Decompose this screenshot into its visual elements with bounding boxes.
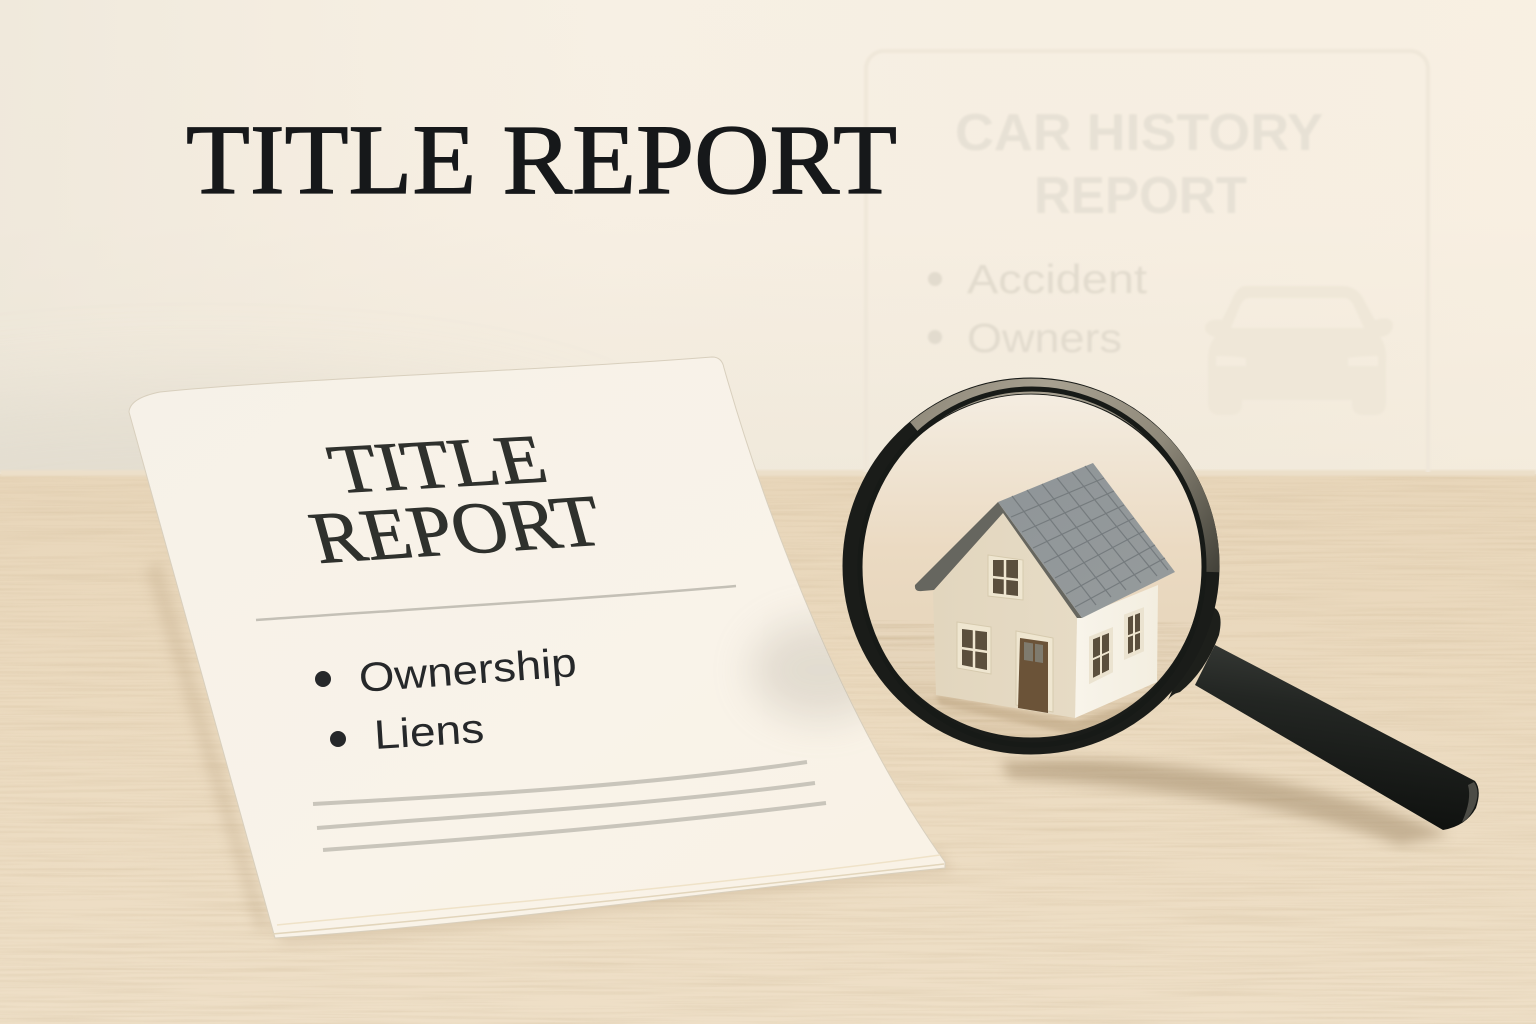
gable roof edge [915,502,1082,618]
door [1016,631,1053,713]
document heading divider [256,586,736,620]
document bullets: Liens [373,705,485,758]
house [915,463,1175,718]
upper window [988,555,1023,600]
lens interior [862,459,1202,738]
document bullets [315,639,578,758]
document pages edge [272,855,944,934]
lower left window [957,622,991,674]
faded car history report panel: Owners [967,315,1122,361]
magnifier shadow on document [750,620,890,720]
roof [998,463,1175,618]
faded car history report panel: REPORT [1034,167,1247,225]
document heading: REPORT [302,481,611,580]
house side wall [1075,585,1158,718]
document bullets: Ownership [357,639,578,701]
main title: TITLE REPORT [186,104,897,215]
faded car history report panel: Accident [967,256,1148,302]
document: title report [129,357,945,938]
faded car history report panel [866,51,1428,491]
house front wall [933,513,1077,718]
document shadow on table [146,560,952,944]
lens rim [851,386,1212,746]
document heading: TITLE [320,421,555,509]
background: wall and table [0,251,1536,1024]
side windows [1091,610,1142,681]
magnifier shadow on table [1000,760,1450,845]
document heading [302,421,611,580]
magnifying glass [850,385,1479,830]
collar [1168,607,1221,700]
document placeholder lines [313,762,826,850]
house shadow [937,696,1138,734]
faded car history report panel: CAR HISTORY [955,104,1323,162]
handle [1195,645,1479,830]
